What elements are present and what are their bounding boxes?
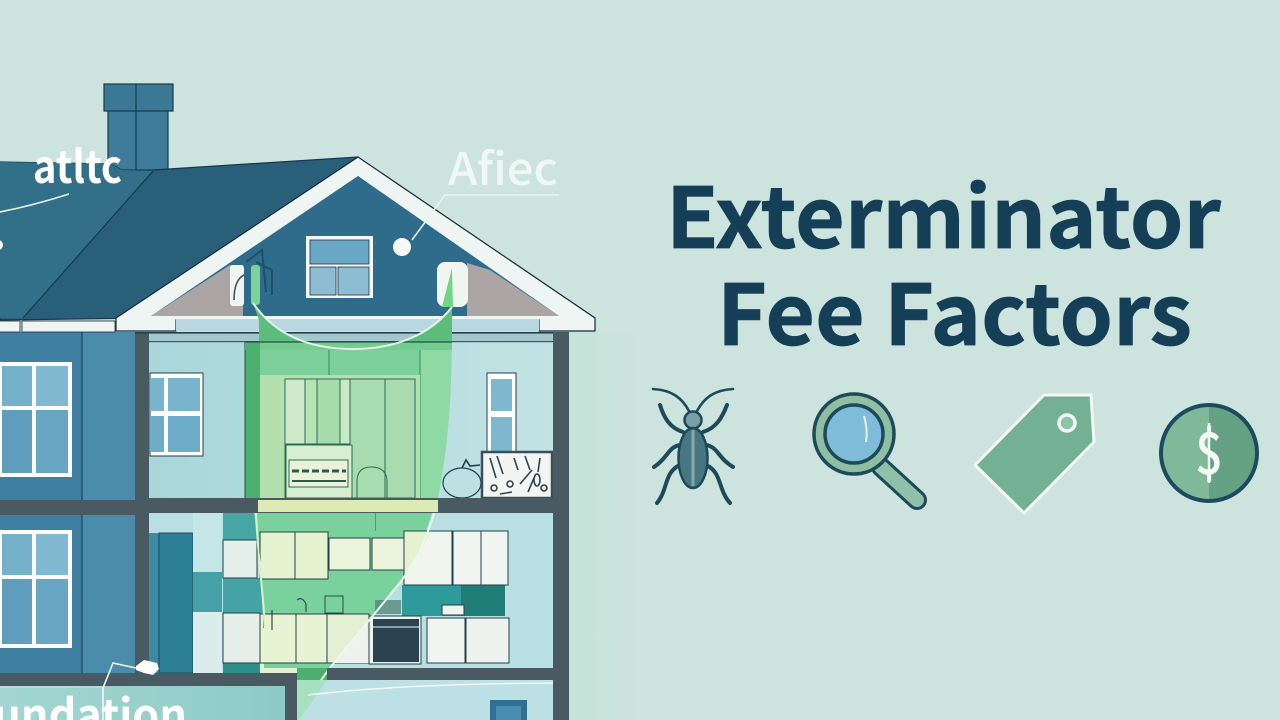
icon: dollar coin: $ (1195, 407, 1223, 491)
foundation label panel (0, 680, 285, 720)
attic label right (393, 133, 559, 256)
upper room left window (150, 373, 203, 456)
left wing upper window (0, 362, 72, 477)
icon: dollar coin (1161, 405, 1257, 501)
patterned crate (482, 452, 552, 498)
green room cabinets (260, 375, 420, 498)
green pest path fill (254, 513, 432, 707)
attic label left (0, 131, 122, 250)
attic label left: atltc (33, 131, 122, 196)
countertop items (264, 596, 464, 630)
left wing wall (0, 332, 135, 675)
attic label right: Afiec (448, 133, 558, 198)
structural posts and floors (0, 332, 569, 720)
title: Fee Factors (717, 249, 1192, 370)
left wing lower window (0, 530, 72, 648)
kitchen (223, 500, 509, 716)
stove (369, 616, 421, 664)
icon: price tag (975, 395, 1094, 513)
attic vents and green arc (230, 250, 468, 350)
green highlighted room (245, 342, 452, 498)
lower floor room (149, 513, 553, 669)
door (149, 533, 193, 673)
gable window (306, 236, 373, 298)
icon: magnifying glass (814, 394, 917, 500)
kitchen lower cabinets (223, 613, 509, 663)
gable (116, 157, 595, 342)
basement room (297, 680, 553, 720)
left roof fascia (0, 321, 115, 332)
kitchen upper cabinets (223, 531, 508, 585)
foundation leader line (103, 660, 159, 720)
green path edge lines (256, 500, 438, 716)
tiled wall column (193, 513, 222, 673)
roof (0, 157, 358, 320)
icon: beetle (653, 389, 733, 503)
title (666, 152, 1221, 370)
highlighted slab end below kitchen (297, 668, 327, 680)
highlighted floor slab (258, 500, 438, 512)
title: Exterminator (666, 152, 1221, 273)
upper floor room (149, 332, 553, 498)
upper room right window (487, 373, 516, 453)
house cutaway illustration (0, 84, 595, 720)
potted object (443, 460, 481, 498)
chimney (104, 84, 173, 173)
